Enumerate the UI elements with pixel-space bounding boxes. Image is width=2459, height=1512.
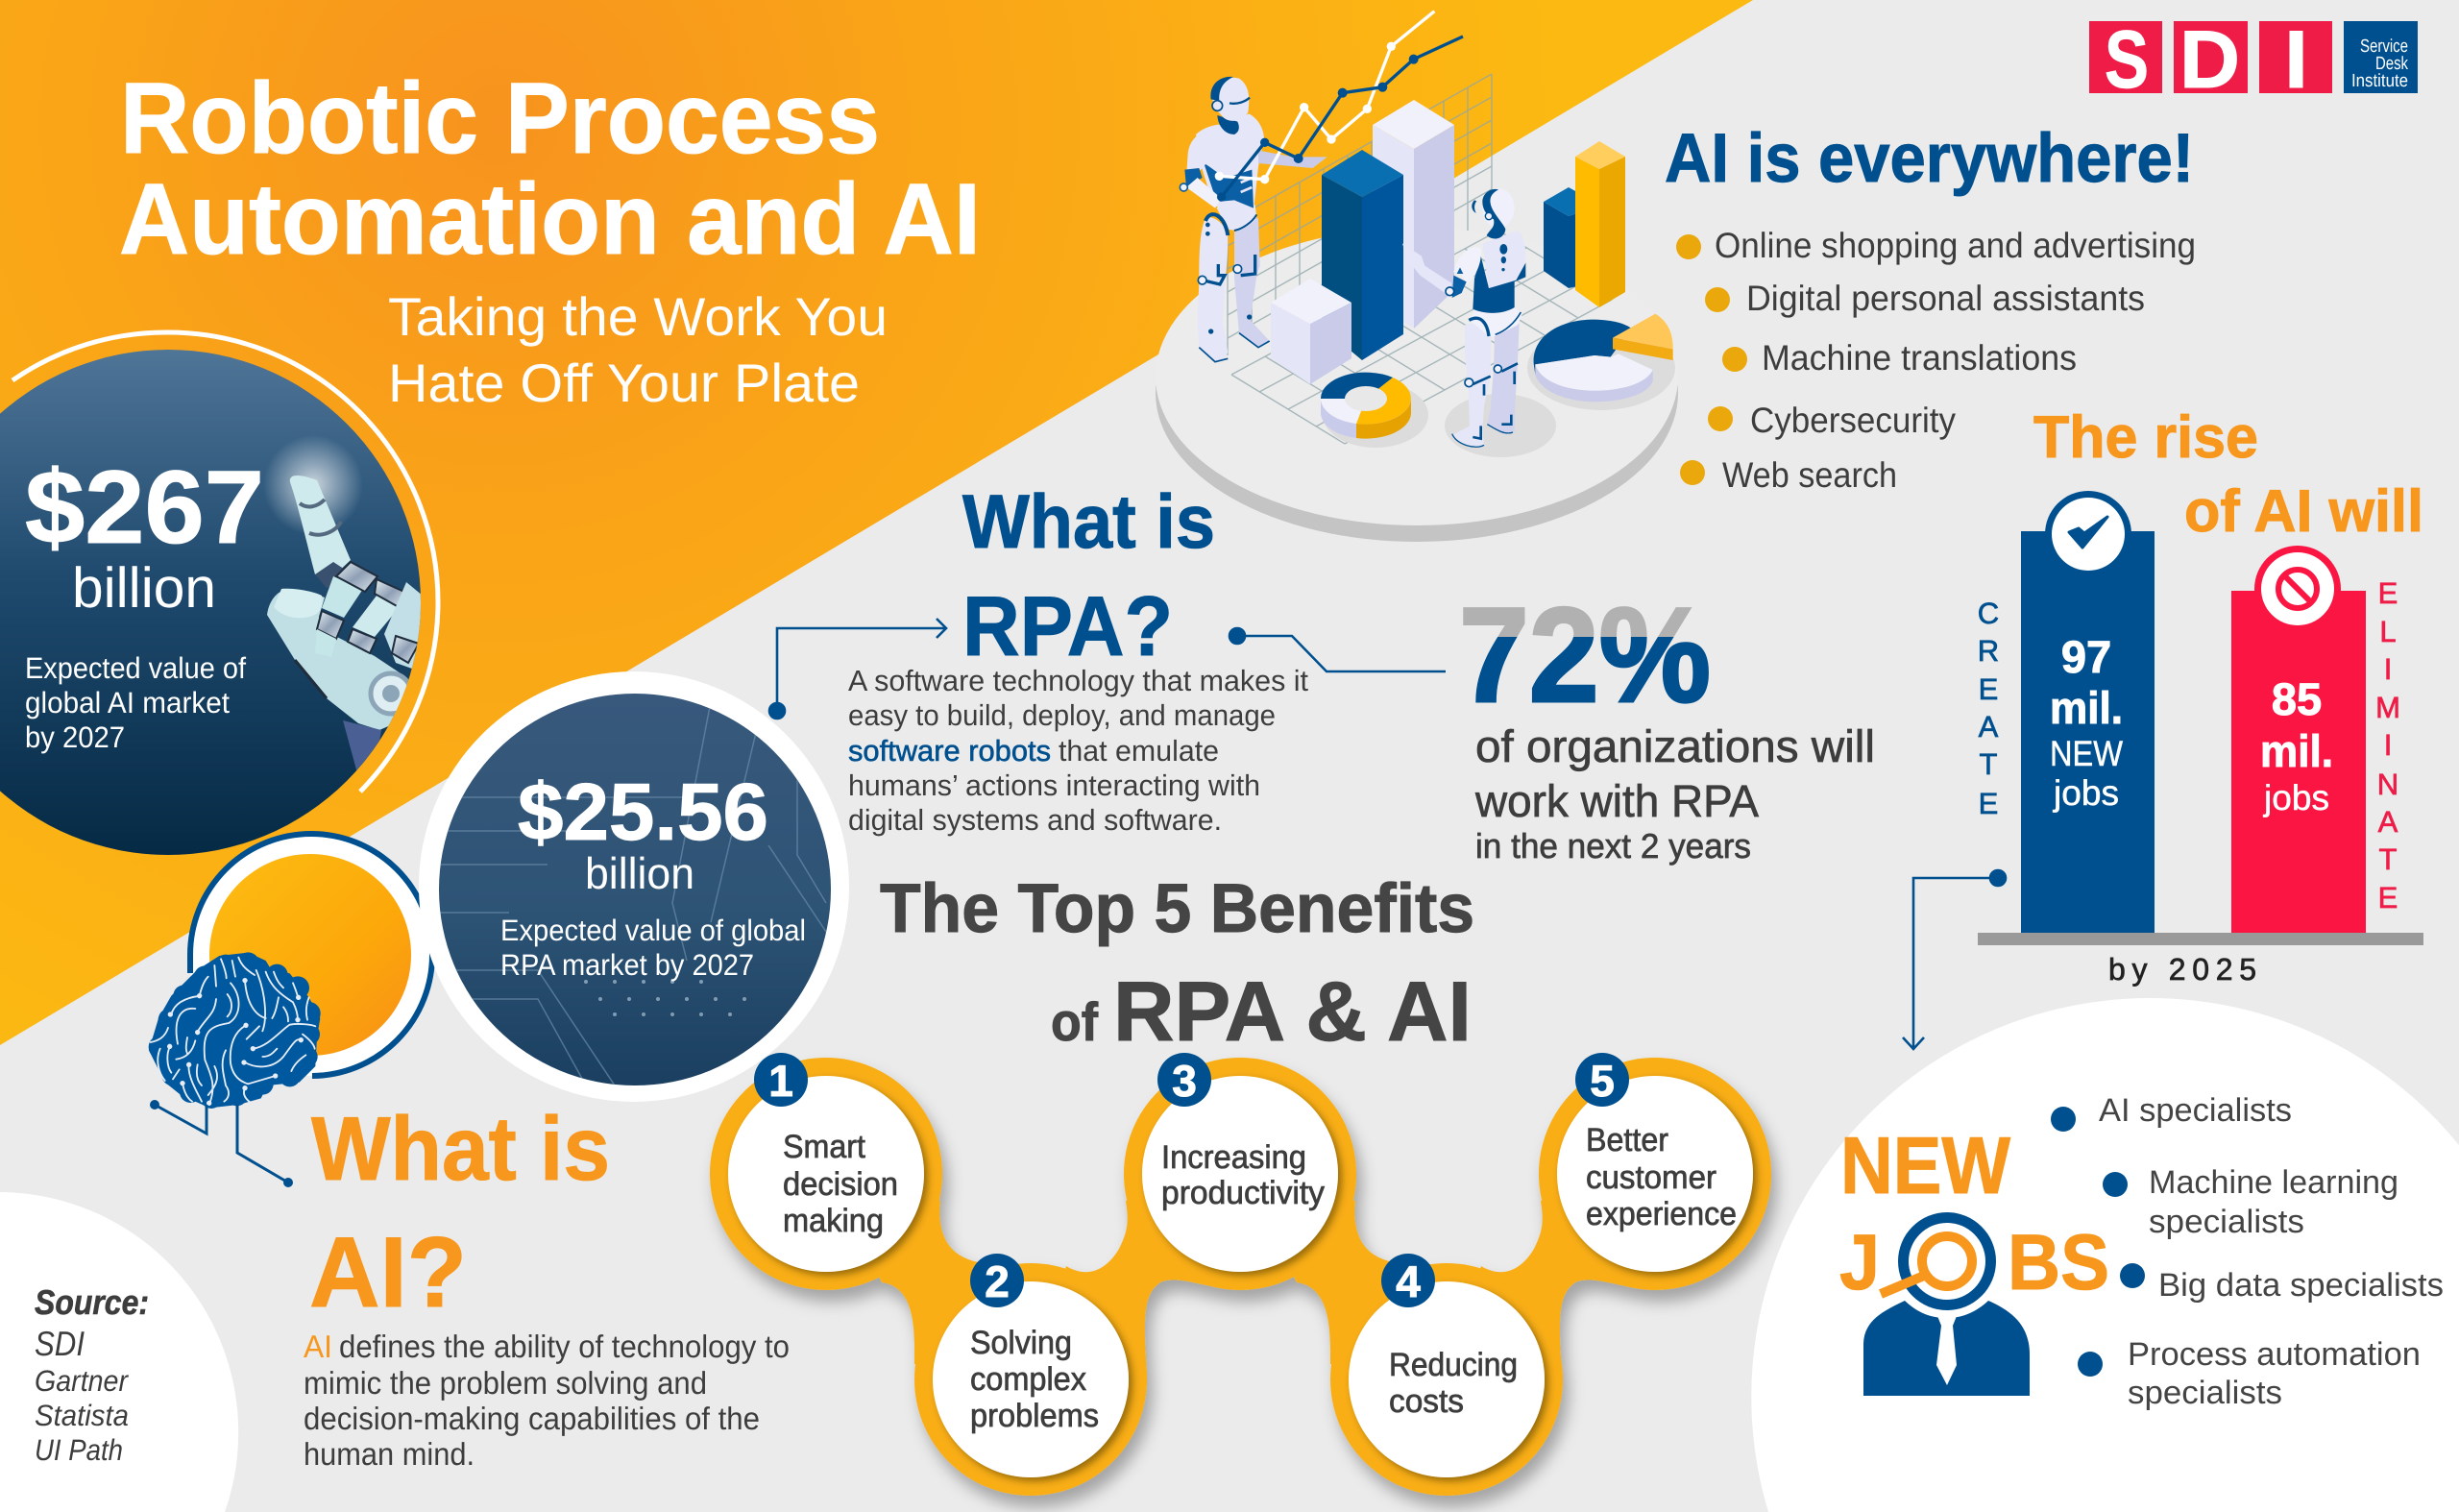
statistic: 72% (1459, 579, 1875, 866)
panel: sources: Gartner (35, 1364, 130, 1398)
label: ELIMINATE: E (2378, 576, 2398, 610)
label: ELIMINATE: T (2379, 842, 2398, 876)
text: RPA definition: that emulate (1059, 735, 1219, 768)
text: AI definition (304, 1329, 790, 1472)
panel: sources: Statista (35, 1399, 129, 1432)
bar: create: NEW (2050, 734, 2123, 773)
label: ELIMINATE (2375, 576, 2400, 915)
label: CREATE: R (1978, 634, 1999, 668)
benefit 5: customer (1586, 1159, 1716, 1196)
panel: sources: UI Path (35, 1433, 123, 1467)
back blue bar (1544, 187, 1577, 288)
list: new job types: Big data specialists (2158, 1267, 2444, 1304)
heading: Top 5 Benefits: RPA & AI (1113, 963, 1472, 1059)
panel: new jobs circle (1751, 998, 2459, 1512)
tall blue bar (1322, 150, 1403, 360)
text: RPA definition: software robots (848, 735, 1051, 768)
benefit 3: 3 (1172, 1056, 1197, 1106)
list: new job types: specialists (2128, 1375, 2282, 1411)
benefit 2: problems (970, 1398, 1099, 1434)
trend lines (1215, 12, 1463, 202)
callout: $267 billion: Expected value of (25, 651, 246, 685)
panel: sources (0, 1192, 238, 1512)
statistic: 72%: 72% (1459, 579, 1711, 730)
benefit 5: 5 (1590, 1056, 1615, 1106)
list: AI is everywhere (1676, 226, 2196, 495)
label: ELIMINATE: M (2375, 691, 2400, 724)
benefit 1: decision (783, 1166, 898, 1203)
subtitle (388, 286, 888, 413)
What is AI heading (309, 1098, 610, 1329)
heading: The rise of AI will: of AI will (2184, 478, 2423, 545)
bar: eliminate: mil. (2260, 725, 2333, 776)
finger 2 (322, 576, 363, 618)
pie chart (1534, 314, 1673, 402)
heading: What is RPA: What is (962, 478, 1215, 564)
label: ELIMINATE: E (2378, 881, 2398, 915)
isometric scene: robots and charts (1156, 12, 1678, 542)
benefit 1: 1 (768, 1056, 793, 1106)
robot left (1180, 77, 1327, 362)
connector: RPA to 72% (1230, 628, 1446, 671)
heading: NEW JOBS: BS (2008, 1219, 2109, 1306)
text: AI definition: decision-making capabilities of the (304, 1401, 760, 1436)
label: CREATE: E (1979, 672, 1998, 706)
baseline (1978, 933, 2423, 945)
panel: sources: SDI (35, 1324, 85, 1363)
label: ELIMINATE: L (2379, 615, 2397, 648)
benefit 4: Reducing (1389, 1347, 1518, 1383)
logo: SDI: D (2179, 14, 2240, 106)
benefit 4: 4 (1396, 1256, 1421, 1306)
list: new job types: AI specialists (2099, 1092, 2292, 1129)
callout: $267 billion (0, 332, 438, 855)
bar: create: jobs (2053, 773, 2119, 813)
benefit 1: Smart (783, 1129, 866, 1165)
small light cube (1271, 279, 1351, 384)
subtitle: Hate Off Your Plate (388, 353, 860, 413)
label: CREATE: T (1980, 747, 1998, 781)
What is AI heading: What is (311, 1098, 610, 1199)
list: AI is everywhere: Online shopping and advertising (1715, 226, 2196, 265)
label: by 2025: by 2025 (2108, 952, 2256, 987)
heading: The rise of AI will (2033, 404, 2423, 545)
circuit lines (155, 1105, 288, 1183)
benefit 2: complex (970, 1361, 1086, 1398)
icon: brain with orange circle (149, 834, 432, 1187)
heading: Top 5 Benefits: of (1051, 991, 1098, 1052)
callout: $25.56 billion: RPA market by 2027 (500, 948, 754, 982)
yellow bar (1575, 141, 1625, 307)
grid wall and floor (1228, 74, 1612, 444)
list: AI is everywhere: Cybersecurity (1750, 401, 1956, 440)
benefit 1: making (783, 1203, 884, 1239)
text: AI definition: mimic the problem solving and (304, 1365, 707, 1401)
callout: $267 billion: billion (72, 556, 216, 620)
callout: $25.56 billion (419, 671, 849, 1102)
list: new job types: Process automation (2128, 1336, 2421, 1373)
arrow: to RPA heading (769, 619, 946, 719)
statistic: 72%: of organizations will (1475, 720, 1875, 771)
statistic: 72%: in the next 2 years (1475, 826, 1751, 866)
benefit 3 (1157, 1053, 1325, 1211)
logo: SDI: Desk (2375, 54, 2408, 74)
heading: Top 5 Benefits: The Top 5 Benefits (880, 870, 1474, 947)
bar: eliminate: jobs (2263, 778, 2329, 817)
label: ELIMINATE: I (2384, 728, 2392, 762)
callout: $267 billion: global AI market (25, 686, 230, 719)
icon: robotic hand (263, 435, 423, 773)
tall light bar (1373, 100, 1454, 329)
benefit 3: Increasing (1161, 1139, 1306, 1176)
bar: create: mil. (2050, 682, 2123, 733)
label: ELIMINATE: A (2378, 805, 2398, 839)
logo: SDI: S (2105, 14, 2149, 106)
benefit 5: Better (1586, 1122, 1668, 1158)
benefit 2: 2 (985, 1256, 1010, 1306)
title (119, 62, 981, 276)
logo: SDI: Service (2360, 37, 2408, 57)
orange diagonal panel (0, 0, 1753, 1045)
panel: sources: Source: (35, 1282, 149, 1322)
heading: NEW JOBS: J (1839, 1219, 1880, 1306)
label: CREATE: C (1978, 597, 1999, 630)
arrow: chart to new jobs (1903, 870, 2006, 1049)
callout: $25.56 billion: $25.56 (518, 767, 768, 857)
heading: AI is everywhere: AI is everywhere! (1665, 120, 2194, 197)
donut chart (1321, 373, 1411, 439)
title: Robotic Process (120, 62, 880, 175)
logo: SDI: I (2284, 14, 2308, 106)
white discs (728, 1076, 1753, 1477)
list: new job types: specialists (2149, 1204, 2304, 1240)
callout: $25.56 billion: Expected value of global (500, 914, 806, 947)
object shadows (1323, 326, 1675, 457)
callout: $267 billion: by 2027 (25, 720, 125, 754)
benefit 3: productivity (1161, 1175, 1325, 1211)
finger 3 (353, 596, 399, 637)
text: RPA definition: humans’ actions interacting with (848, 769, 1260, 802)
text: AI definition: AI (304, 1329, 332, 1364)
text: AI definition: defines the ability of technology to (339, 1329, 790, 1364)
callout: $25.56 billion: billion (585, 848, 694, 898)
list: AI is everywhere: Digital personal assistants (1746, 279, 2145, 318)
benefit 1 (754, 1053, 898, 1239)
logo: SDI: Institute (2351, 71, 2408, 91)
label: CREATE: A (1979, 710, 1999, 744)
bar: eliminate: 85 (2272, 673, 2322, 724)
circuit texture (437, 701, 836, 1085)
bar: create: 97 (2061, 631, 2111, 682)
benefit 4 (1381, 1254, 1518, 1420)
orange chain (710, 1058, 1771, 1496)
list: AI is everywhere: Machine translations (1762, 338, 2077, 378)
heading: What is RPA: RPA? (962, 578, 1173, 673)
label: CREATE (1978, 597, 1999, 820)
benefit 5 (1575, 1053, 1737, 1232)
What is AI heading: AI? (309, 1217, 467, 1329)
heading: Top 5 Benefits (880, 870, 1474, 1059)
finger 4 (384, 582, 423, 672)
title: Automation and AI (119, 163, 981, 276)
list: AI is everywhere: Web search (1722, 455, 1897, 495)
label: ELIMINATE: I (2384, 652, 2392, 686)
bar chart: jobs by 2025 (1978, 491, 2423, 987)
text: RPA definition: A software technology that makes it (848, 665, 1309, 697)
bar: create (2021, 491, 2155, 933)
statistic: 72%: work with RPA (1474, 775, 1760, 826)
text: RPA definition (848, 665, 1309, 837)
heading: NEW JOBS: NEW (1840, 1120, 2011, 1210)
palm and thumb (267, 590, 413, 730)
callout: $267 billion: $267 (25, 449, 264, 565)
heading: NEW JOBS (1839, 1120, 2109, 1306)
list: new job types (2051, 1092, 2444, 1411)
robot right (1402, 188, 1526, 447)
text: RPA definition: digital systems and software. (848, 804, 1222, 837)
heading: The rise of AI will: The rise (2033, 404, 2258, 471)
logo: SDI (2089, 14, 2418, 106)
list: new job types: Machine learning (2149, 1164, 2398, 1201)
text: AI definition: human mind. (304, 1436, 475, 1472)
label: CREATE: E (1979, 787, 1998, 820)
bar: eliminate (2231, 546, 2366, 933)
platform (1156, 228, 1678, 542)
benefit 2: Solving (970, 1325, 1072, 1361)
label: ELIMINATE: N (2377, 768, 2398, 801)
heading: What is RPA (962, 478, 1215, 673)
benefit 5: experience (1586, 1196, 1737, 1232)
panel: benefits chain (710, 1053, 1771, 1496)
icon: job seeker with magnifier (1863, 1212, 2030, 1396)
benefit 4: costs (1389, 1383, 1464, 1420)
subtitle: Taking the Work You (388, 286, 888, 347)
text: RPA definition: easy to build, deploy, and manage (848, 699, 1276, 732)
benefit 2 (970, 1254, 1099, 1434)
